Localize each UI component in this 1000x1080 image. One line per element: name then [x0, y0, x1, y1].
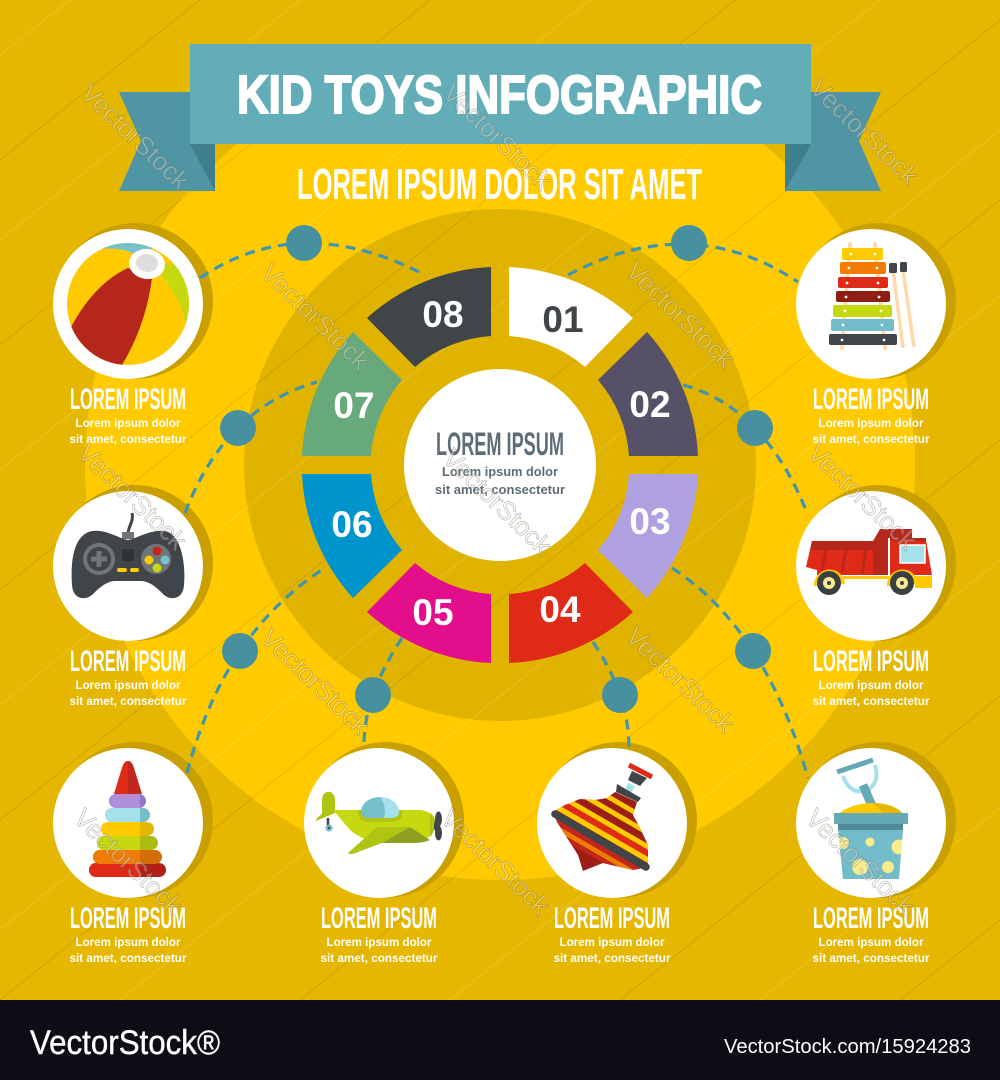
label: LOREM IPSUM	[70, 383, 186, 416]
watermarks: VectorStock	[437, 443, 558, 561]
segment 05	[367, 563, 491, 663]
watermarks: VectorStock	[435, 803, 556, 921]
watermarks	[68, 73, 925, 921]
watermarks: VectorStock	[620, 621, 741, 739]
watermarks: VectorStock	[804, 73, 925, 191]
panel: airplane	[304, 742, 464, 965]
watermarks: VectorStock	[437, 78, 558, 196]
large bright circle	[85, 50, 915, 880]
segment 01	[509, 267, 633, 367]
subtitle: LOREM IPSUM DOLOR SIT AMET	[297, 160, 702, 209]
label	[812, 383, 930, 446]
segment 02	[598, 332, 698, 456]
panel: dump truck	[796, 485, 956, 708]
ribbon right fold	[785, 144, 811, 191]
label	[70, 902, 187, 965]
title: KID TOYS INFOGRAPHIC	[237, 65, 762, 125]
dashed connectors with dots	[185, 225, 808, 778]
label: LOREM IPSUM	[70, 902, 186, 935]
centre text	[435, 464, 565, 497]
label: Lorem ipsum dolor	[560, 935, 665, 949]
label	[320, 902, 438, 965]
watermarks: VectorStock	[75, 78, 196, 196]
wheel backing circle	[244, 209, 756, 721]
label	[70, 645, 187, 708]
icon: airplane	[316, 792, 442, 854]
segmented wheel	[302, 267, 698, 663]
icon: spinning top	[551, 762, 654, 871]
icon: dump truck	[806, 529, 932, 595]
label: Lorem ipsum dolor	[326, 935, 432, 949]
label: sit amet, consectetur	[812, 951, 930, 965]
label: sit amet, consectetur	[812, 694, 930, 708]
footer bar	[0, 1000, 1000, 1080]
label	[812, 645, 930, 708]
label	[70, 383, 187, 446]
segment 05: 05	[412, 592, 454, 633]
label: sit amet, consectetur	[320, 951, 438, 965]
label: Lorem ipsum dolor	[76, 678, 181, 692]
panel: sand bucket	[796, 742, 956, 965]
label	[812, 902, 930, 965]
label: Lorem ipsum dolor	[76, 935, 181, 949]
label	[554, 902, 671, 965]
label: sit amet, consectetur	[70, 951, 187, 965]
title banner	[119, 44, 881, 191]
label: sit amet, consectetur	[554, 951, 671, 965]
segment 04: 04	[539, 589, 581, 630]
watermarks: VectorStock	[255, 258, 376, 376]
icon: sand bucket and shovel	[834, 760, 908, 879]
watermarks: VectorStock	[255, 623, 376, 741]
label: LOREM IPSUM	[554, 902, 670, 935]
label: sit amet, consectetur	[70, 432, 187, 446]
icon: xylophone	[829, 244, 914, 348]
segment 08: 08	[422, 294, 464, 335]
panel: spinning top	[537, 742, 697, 965]
label: Lorem ipsum dolor	[76, 416, 181, 430]
centre circle	[404, 369, 596, 561]
label: sit amet, consectetur	[812, 432, 930, 446]
watermarks: VectorStock	[800, 803, 921, 921]
icon: ring pyramid	[89, 761, 166, 877]
panel: xylophone	[796, 223, 956, 446]
segment 03: 03	[629, 501, 671, 542]
ribbon right tail	[785, 92, 881, 191]
panel: ring pyramid	[53, 742, 213, 965]
watermarks: VectorStock	[72, 438, 193, 556]
centre heading: LOREM IPSUM	[436, 426, 564, 462]
ribbon left tail	[119, 92, 215, 191]
footer logo: VectorStock®	[30, 1024, 220, 1062]
panel: beach ball	[53, 223, 213, 446]
segment 01: 01	[542, 299, 584, 340]
label: Lorem ipsum dolor	[818, 935, 924, 949]
watermarks: VectorStock	[620, 256, 741, 374]
segment 06: 06	[331, 504, 373, 545]
watermarks: VectorStock	[802, 438, 923, 556]
segment 02: 02	[629, 384, 671, 425]
ribbon left fold	[190, 144, 215, 191]
segment 08	[367, 267, 491, 367]
label: sit amet, consectetur	[70, 694, 187, 708]
segment 03	[598, 474, 698, 598]
label: LOREM IPSUM	[70, 645, 186, 678]
centre text: sit amet, consectetur	[435, 482, 565, 497]
panel: gamepad	[53, 485, 213, 708]
segment 04	[509, 563, 633, 663]
icon: gamepad	[72, 513, 184, 598]
label: Lorem ipsum dolor	[818, 678, 924, 692]
icon: beach ball	[67, 243, 189, 365]
ribbon main band	[190, 44, 811, 144]
label: Lorem ipsum dolor	[818, 416, 924, 430]
watermarks: VectorStock	[68, 803, 189, 921]
footer url: VectorStock.com/15924283	[724, 1036, 971, 1058]
segment 06	[302, 474, 402, 598]
segment 07: 07	[333, 385, 375, 426]
label: LOREM IPSUM	[321, 902, 437, 935]
centre text: Lorem ipsum dolor	[442, 464, 558, 479]
segment 07	[302, 332, 402, 456]
